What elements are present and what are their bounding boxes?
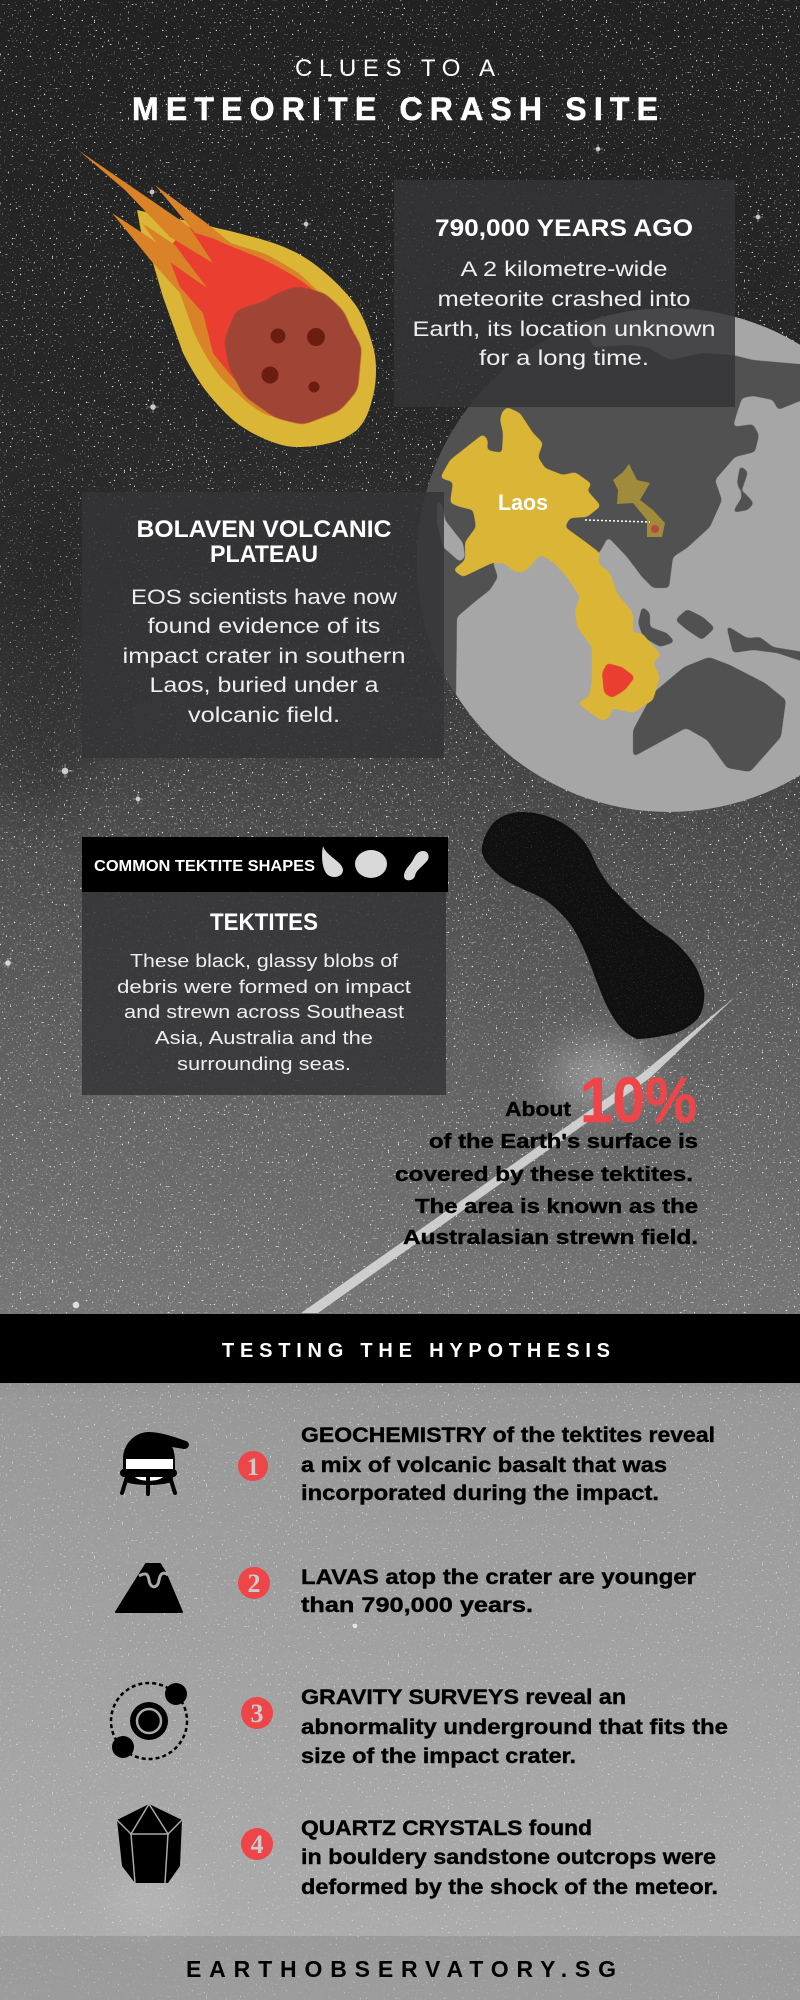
text: quartz crystals: in bouldery sandstone outcrops were bbox=[301, 1846, 716, 1869]
text: geochemistry bbox=[301, 1424, 715, 1505]
text: gravity surveys: GRAVITY SURVEYS reveal an bbox=[301, 1686, 626, 1709]
panel: Bolaven volcanic plateau bbox=[82, 492, 444, 758]
number 1: 1 bbox=[247, 1454, 259, 1481]
panel: tektites: These black, glassy blobs of bbox=[130, 951, 399, 971]
text: quartz crystals bbox=[301, 1817, 718, 1899]
panel: Bolaven volcanic plateau: EOS scientists have now bbox=[131, 586, 398, 609]
callout: 10% statistic: covered by these tektites. bbox=[395, 1164, 693, 1186]
number 1 bbox=[238, 1451, 268, 1481]
panel: 790,000 years ago: 790,000 YEARS AGO bbox=[435, 215, 693, 242]
number 3 bbox=[241, 1697, 273, 1729]
number 4: 4 bbox=[250, 1830, 264, 1859]
callout: 10% statistic: Australasian strewn field. bbox=[403, 1227, 698, 1249]
title bbox=[132, 55, 658, 127]
footer bbox=[0, 1936, 800, 2000]
panel: 790,000 years ago: Earth, its location unknown bbox=[412, 318, 716, 341]
callout: 10% statistic bbox=[395, 1064, 698, 1249]
panel: Bolaven volcanic plateau: BOLAVEN VOLCANIC bbox=[136, 516, 392, 543]
footer: EARTHOBSERVATORY.SG bbox=[186, 1956, 616, 1982]
text: gravity surveys: size of the impact crater. bbox=[301, 1745, 576, 1768]
panel: common tektite shapes: COMMON TEKTITE SHAPES bbox=[94, 858, 315, 875]
panel: 790,000 years ago: meteorite crashed into bbox=[438, 288, 690, 311]
icon: volcano bbox=[116, 1564, 182, 1612]
callout: 10% statistic: 10% bbox=[580, 1064, 697, 1136]
panel: tektites: debris were formed on impact bbox=[117, 977, 411, 997]
number 4 bbox=[241, 1828, 273, 1860]
callout: 10% statistic: The area is known as the bbox=[415, 1196, 698, 1218]
icon: orbit bbox=[111, 1683, 187, 1759]
text: gravity surveys bbox=[301, 1686, 728, 1768]
callout: 10% statistic: of the Earth's surface is bbox=[429, 1131, 698, 1153]
panel: Bolaven volcanic plateau: PLATEAU bbox=[210, 541, 318, 568]
map: Laos enlarged: Laos bbox=[498, 490, 548, 515]
panel: 790,000 years ago: A 2 kilometre-wide bbox=[460, 258, 668, 281]
text: geochemistry: GEOCHEMISTRY of the tektites reveal bbox=[301, 1424, 715, 1447]
panel: Bolaven volcanic plateau: impact crater in southern bbox=[122, 645, 406, 668]
text: lavas bbox=[301, 1566, 696, 1617]
panel: 790,000 years ago: for a long time. bbox=[479, 347, 649, 370]
meteorite illustration bbox=[78, 150, 376, 447]
text: geochemistry: a mix of volcanic basalt that was bbox=[301, 1454, 667, 1477]
tektite specimen bbox=[482, 812, 704, 1039]
text: lavas: LAVAS atop the crater are younger bbox=[301, 1566, 696, 1589]
title: METEORITE CRASH SITE bbox=[132, 91, 658, 127]
text: quartz crystals: deformed by the shock of the meteor. bbox=[301, 1876, 718, 1899]
panel: tektites: and strewn across Southeast bbox=[124, 1002, 404, 1022]
panel: Bolaven volcanic plateau: found evidence of its bbox=[148, 615, 380, 638]
icon: quartz crystal bbox=[117, 1804, 182, 1883]
band: testing the hypothesis: TESTING THE HYPOTHESIS bbox=[222, 1340, 610, 1362]
panel: common tektite shapes bbox=[82, 837, 448, 892]
text: quartz crystals: QUARTZ CRYSTALS found bbox=[301, 1817, 592, 1840]
band: testing the hypothesis bbox=[0, 1314, 800, 1383]
icon: flask bbox=[120, 1432, 189, 1494]
text: gravity surveys: abnormality underground that fits the bbox=[301, 1716, 728, 1739]
panel: tektites: TEKTITES bbox=[210, 909, 318, 936]
map: Laos enlarged bbox=[440, 407, 665, 721]
text: lavas: than 790,000 years. bbox=[301, 1594, 533, 1617]
panel: Bolaven volcanic plateau: volcanic field. bbox=[188, 704, 340, 727]
panel: Bolaven volcanic plateau: Laos, buried under a bbox=[150, 674, 379, 697]
callout: 10% statistic: About bbox=[505, 1099, 571, 1121]
title: CLUES TO A bbox=[295, 55, 495, 82]
panel: tektites bbox=[82, 892, 446, 1095]
number 2: 2 bbox=[248, 1569, 260, 1598]
globe bbox=[400, 308, 800, 812]
number 2 bbox=[238, 1567, 270, 1599]
panel: tektites: surrounding seas. bbox=[177, 1054, 351, 1074]
number 3: 3 bbox=[250, 1699, 264, 1728]
text: geochemistry: incorporated during the impact. bbox=[301, 1482, 659, 1505]
panel: 790,000 years ago bbox=[394, 180, 735, 407]
panel: tektites: Asia, Australia and the bbox=[155, 1028, 373, 1048]
